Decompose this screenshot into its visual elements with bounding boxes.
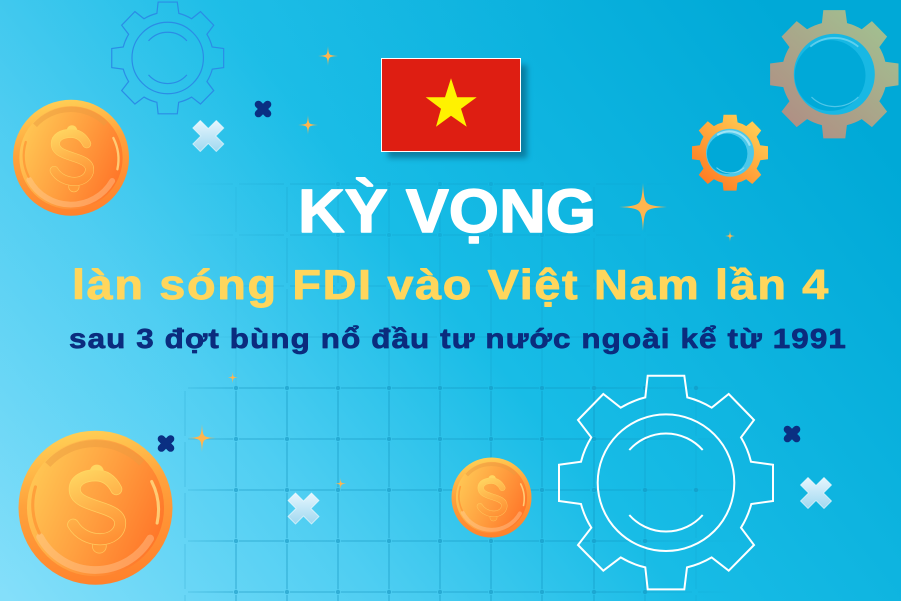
icon: grey-green gear, top right	[770, 10, 898, 138]
subtitle: làn sóng FDI vào Việt Nam lần 4	[72, 261, 830, 308]
icon: white outline gear, bottom right	[559, 376, 773, 589]
tagline: sau 3 đợt bùng nổ đầu tư nước ngoài kể từ 1991	[69, 323, 847, 354]
title: KỲ VỌNG	[298, 177, 596, 245]
dark x marks	[161, 104, 797, 448]
icon: Vietnam flag	[382, 58, 527, 158]
icon: orange gear, top right	[692, 115, 768, 191]
sparkles	[188, 46, 736, 490]
background grid	[185, 182, 740, 601]
icon: dollar coin, bottom left	[19, 431, 173, 585]
icon: dollar coin, top left	[13, 100, 129, 216]
light x marks	[193, 120, 832, 524]
icon: blue outline gear, top left	[112, 2, 224, 114]
icon: dollar coin, bottom centre	[452, 458, 532, 538]
